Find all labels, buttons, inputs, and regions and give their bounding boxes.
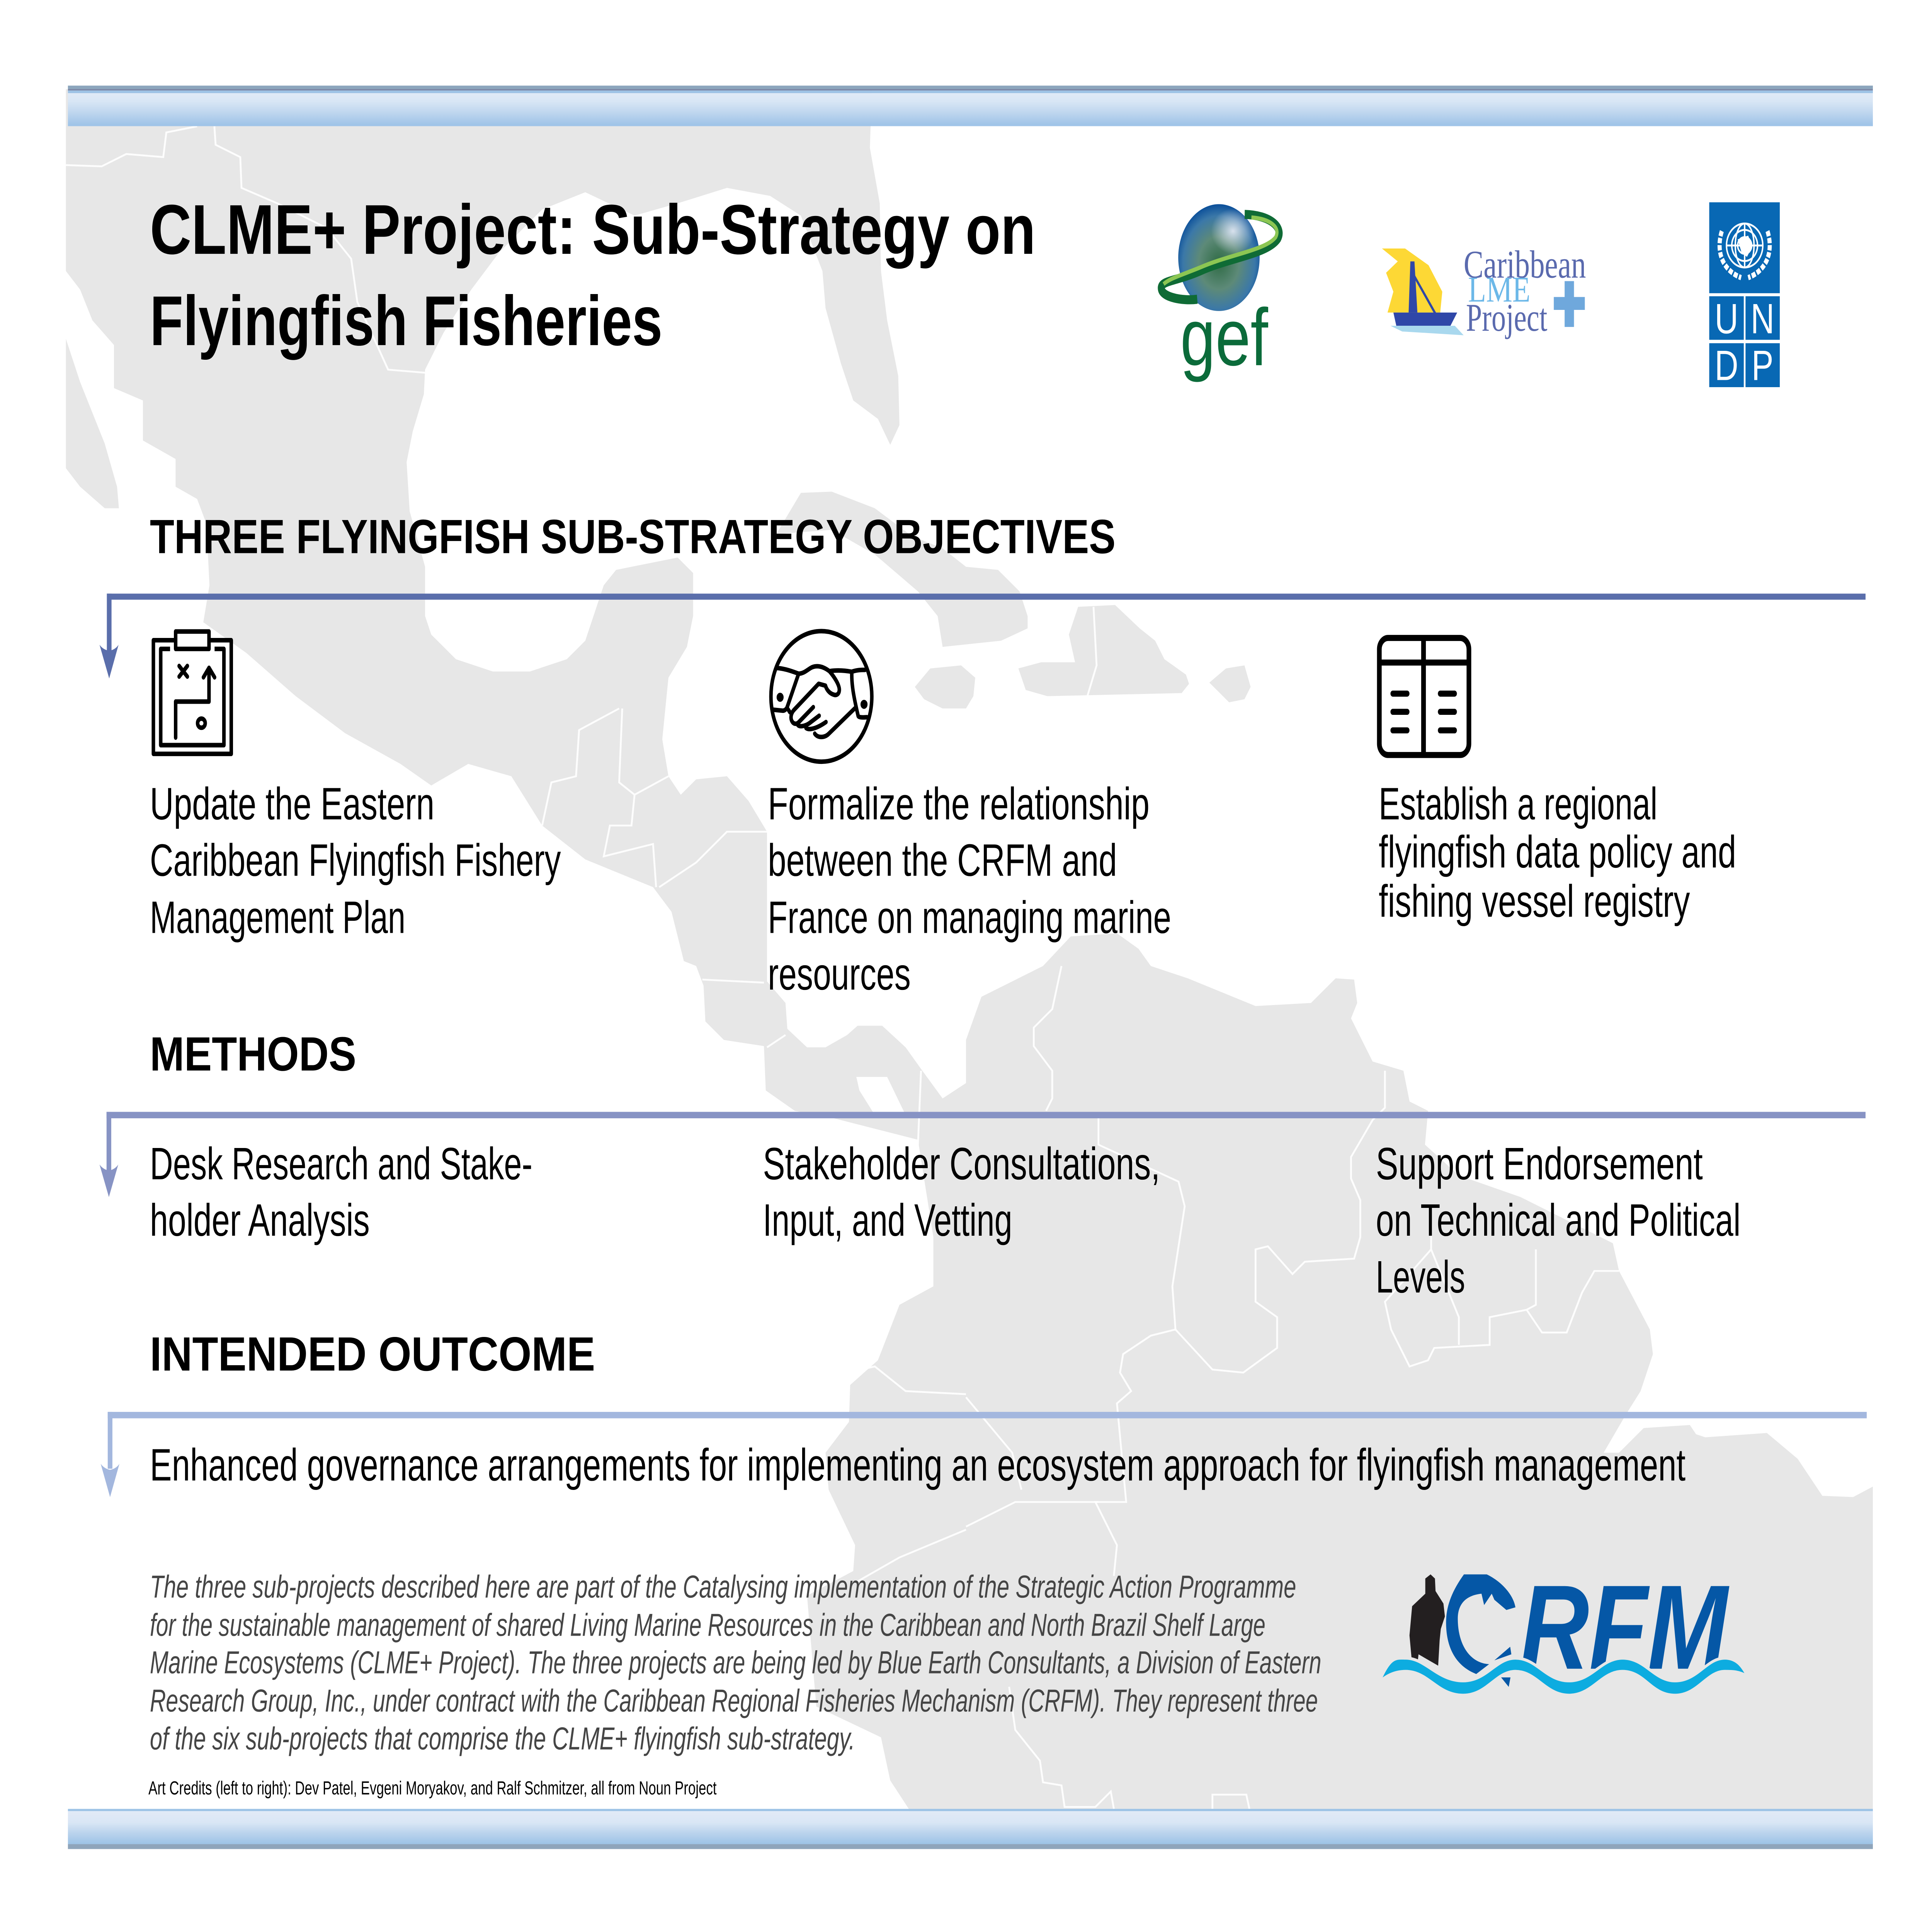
method 1 text — [150, 1138, 532, 1246]
logo: CRFM — [1379, 1560, 1748, 1695]
objective 2 text: Formalize the relationship — [768, 779, 1150, 829]
italic note: Research Group, Inc., under contract with the Caribbean Regional Fisheries Mechanism (CRFM). They represent three — [150, 1683, 1318, 1718]
title: CLME+ Project: Sub-Strategy on — [150, 190, 1036, 269]
arrow: outcome — [101, 1412, 1867, 1497]
objective 3 text: Establish a regional — [1379, 779, 1657, 829]
logo: CRFM: RFM — [1520, 1560, 1730, 1694]
italic note — [150, 1569, 1321, 1756]
objective 3 text: fishing vessel registry — [1379, 876, 1690, 927]
title: Flyingfish Fisheries — [150, 282, 662, 360]
icon: clipboard with play diagram — [153, 631, 231, 754]
heading: objectives: THREE FLYINGFISH SUB-STRATEGY OBJECTIVES — [150, 510, 1116, 563]
italic note: of the six sub-projects that comprise the CLME+ flyingfish sub-strategy. — [150, 1721, 855, 1756]
objective 1 text: Caribbean Flyingfish Fishery — [150, 835, 561, 886]
objective 3 text: flyingfish data policy and — [1379, 827, 1736, 878]
objective 1 text: Update the Eastern — [150, 779, 434, 829]
method 2 text: Input, and Vetting — [763, 1195, 1012, 1246]
method 1 text: holder Analysis — [150, 1195, 370, 1246]
logo: UNDP: P — [1752, 342, 1774, 389]
method 3 text — [1376, 1138, 1741, 1303]
icon: data table — [1379, 638, 1469, 755]
method 3 text: Support Endorsement — [1376, 1138, 1703, 1189]
logo: Caribbean LME Project: Project — [1466, 296, 1548, 339]
logo: UNDP: D — [1715, 342, 1738, 389]
italic note: for the sustainable management of shared Living Marine Resources in the Caribbean and North Brazil Shelf Large — [150, 1607, 1265, 1643]
method 3 text: on Technical and Political — [1376, 1195, 1741, 1246]
method 2 text: Stakeholder Consultations, — [763, 1138, 1160, 1189]
italic note: Marine Ecosystems (CLME+ Project). The three projects are being led by Blue Earth Consultants, a Division of Eastern — [150, 1645, 1321, 1680]
bottom decorative bar — [68, 1809, 1873, 1849]
logo: UNDP: N — [1751, 295, 1774, 342]
arrow: objectives — [100, 594, 1866, 679]
heading: intended outcome: INTENDED OUTCOME — [150, 1327, 595, 1381]
art credits: Art Credits (left to right): Dev Patel, Evgeni Moryakov, and Ralf Schmitzer, all from Noun Project — [148, 1777, 717, 1799]
logo: GEF — [1161, 204, 1279, 383]
logo: UNDP — [1709, 202, 1780, 389]
objective 2 text: resources — [768, 949, 911, 999]
outcome text: Enhanced governance arrangements for implementing an ecosystem approach for flyingfish management — [150, 1439, 1685, 1490]
objective 2 text: between the CRFM and — [768, 835, 1117, 886]
logo: UNDP: U — [1715, 295, 1738, 342]
objective 1 text: Management Plan — [150, 892, 405, 943]
objective 1 text — [150, 779, 561, 943]
logo: Caribbean LME Project — [1382, 243, 1586, 339]
heading: methods: METHODS — [150, 1027, 356, 1081]
top decorative bar — [68, 86, 1873, 126]
method 1 text: Desk Research and Stake- — [150, 1138, 532, 1189]
objective 2 text: France on managing marine — [768, 892, 1171, 943]
arrow: methods — [100, 1112, 1866, 1197]
logo: Caribbean LME Project: Caribbean — [1464, 243, 1586, 286]
objective 3 text — [1379, 779, 1736, 927]
title — [150, 190, 1036, 360]
icon: handshake — [771, 631, 872, 762]
logo: GEF: gef — [1180, 292, 1268, 383]
objective 2 text — [768, 779, 1171, 999]
italic note: The three sub-projects described here are part of the Catalysing implementation of the Strategic Action Programme — [150, 1569, 1296, 1604]
method 2 text — [763, 1138, 1160, 1246]
logo: Caribbean LME Project: LME — [1468, 269, 1531, 310]
method 3 text: Levels — [1376, 1252, 1465, 1303]
